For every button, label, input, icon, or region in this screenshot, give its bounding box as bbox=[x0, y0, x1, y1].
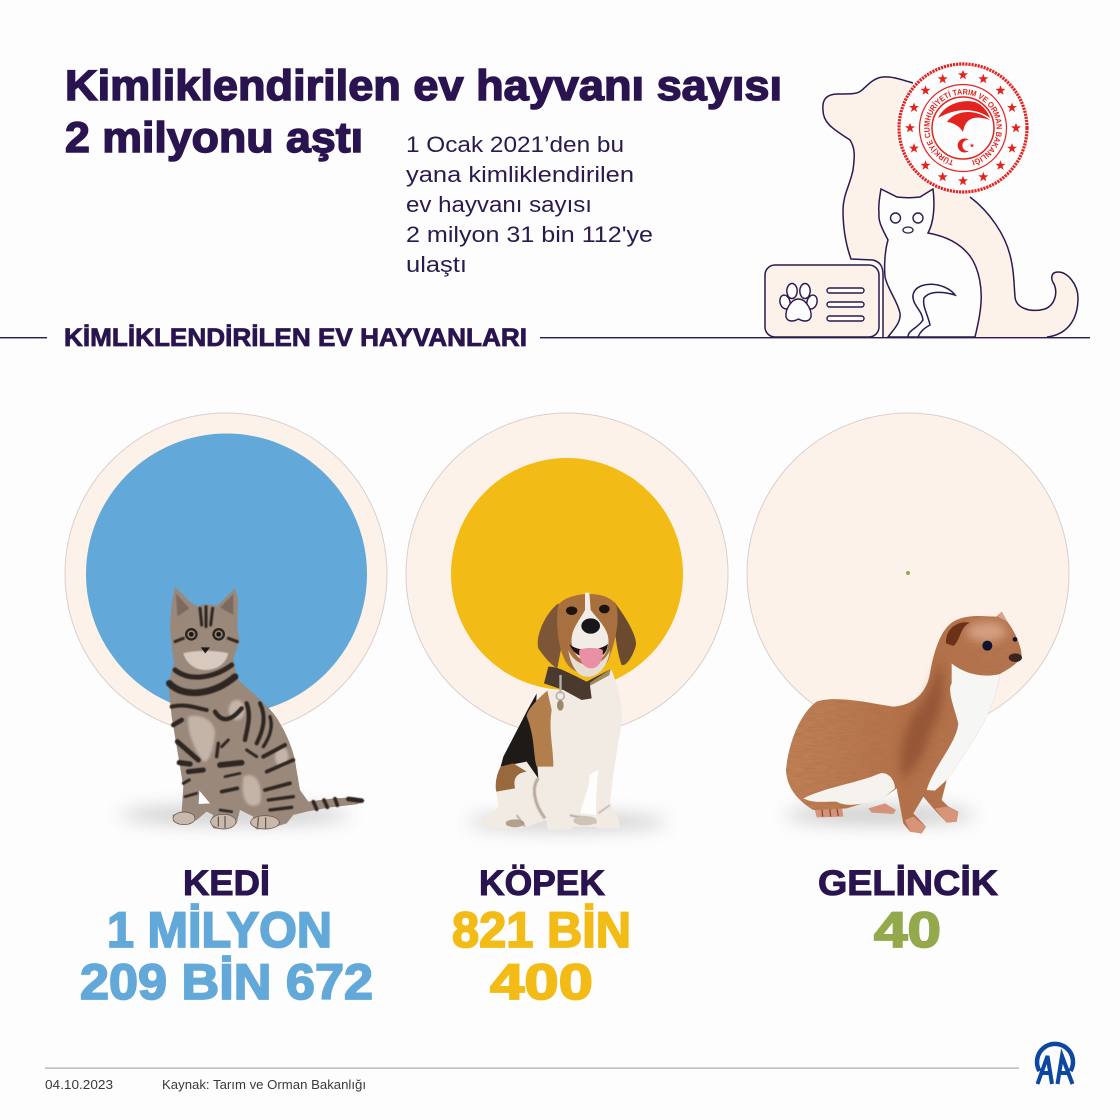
ID card bbox=[765, 265, 879, 337]
beagle left ear bbox=[538, 603, 563, 668]
label: ferret count bbox=[818, 864, 998, 958]
photo: ferret bbox=[785, 612, 1022, 833]
icon: AA logo bbox=[1037, 1044, 1073, 1084]
intro text: ulaştı bbox=[406, 252, 467, 277]
footer: date and source bbox=[45, 1068, 1019, 1092]
seal: ministry of agriculture and forestry bbox=[896, 62, 1029, 195]
title bbox=[65, 62, 782, 162]
ferret white belly bbox=[803, 773, 895, 805]
ferret body bbox=[786, 612, 1022, 833]
label: cat count: KEDİ bbox=[183, 864, 270, 903]
intro text: 1 Ocak 2021’den bu bbox=[406, 132, 624, 157]
beagle white blaze and muzzle bbox=[571, 593, 608, 662]
beagle brown shoulder bbox=[527, 691, 553, 767]
cat lighter patches bbox=[188, 700, 288, 806]
dog silhouette bbox=[823, 77, 1078, 337]
title: Kimliklendirilen ev hayvanı sayısı bbox=[65, 62, 782, 110]
beagle nose bbox=[581, 618, 600, 634]
beagle right ear bbox=[614, 602, 636, 665]
beagle mouth bbox=[569, 644, 608, 658]
ferret nose bbox=[1009, 653, 1022, 662]
cat light chin and muzzle bbox=[183, 651, 228, 670]
label: dog count bbox=[452, 864, 631, 1010]
card text lines bbox=[827, 288, 864, 321]
cat ears inner bbox=[176, 593, 233, 617]
cat markings bbox=[169, 607, 362, 812]
ferret dark neck and shoulder bbox=[901, 660, 943, 780]
beagle black saddle bbox=[501, 693, 538, 778]
beagle head bbox=[557, 594, 618, 674]
cat eyes bbox=[185, 628, 225, 641]
ferret near feet bbox=[905, 807, 958, 833]
ferret white chest bbox=[927, 663, 1000, 791]
photo: beagle bbox=[467, 593, 667, 830]
seal crescent and star bbox=[958, 138, 969, 153]
beagle paw smudges bbox=[506, 819, 524, 827]
beagle body bbox=[485, 670, 622, 830]
title: 2 milyonu aştı bbox=[65, 114, 363, 162]
section heading with rule: KİMLİKLENDİRİLEN EV HAYVANLARI bbox=[64, 324, 527, 352]
panel: cat circle bbox=[65, 413, 387, 735]
cat tail bbox=[908, 284, 955, 337]
intro text: ev hayvanı sayısı bbox=[406, 192, 592, 217]
photo: cat bbox=[120, 587, 365, 829]
label: cat count: 209 BİN 672 bbox=[80, 954, 373, 1010]
seal circular text: TÜRKİYE CUMHURİYETİ TARIM VE ORMAN BAKANLIĞI bbox=[924, 88, 1002, 166]
beagle collar bbox=[544, 667, 610, 700]
label: dog count: KÖPEK bbox=[479, 864, 605, 903]
label: cat count: 1 MİLYON bbox=[107, 902, 332, 958]
intro text: yana kimliklendirilen bbox=[406, 162, 634, 187]
intro text: 2 milyon 31 bin 112'ye bbox=[406, 222, 653, 247]
label: dog count: 400 bbox=[490, 954, 593, 1010]
dog outline bbox=[823, 77, 1078, 337]
paw print bbox=[778, 284, 819, 321]
label: ferret count: 40 bbox=[874, 902, 941, 958]
label: ferret count: GELİNCİK bbox=[818, 864, 998, 903]
beagle eyes bbox=[566, 605, 610, 615]
panel: ferret circle bbox=[747, 413, 1069, 735]
intro text bbox=[406, 132, 653, 277]
label: dog count: 821 BİN bbox=[452, 902, 631, 958]
ferret eyes bbox=[982, 641, 992, 651]
footer: date and source: Kaynak: Tarım ve Orman Bakanlığı bbox=[162, 1078, 366, 1092]
cat eyes and nose bbox=[890, 213, 900, 223]
seal wing emblem bbox=[938, 101, 990, 132]
illustration: dog, cat and ID card bbox=[765, 77, 1078, 337]
ferret head highlight bbox=[967, 622, 1007, 642]
panel: dog circle bbox=[406, 413, 728, 735]
label: cat count bbox=[80, 864, 373, 1010]
beagle tag bbox=[556, 675, 564, 711]
beagle leg shading bbox=[517, 778, 610, 827]
beagle tongue bbox=[579, 648, 603, 668]
ferret far feet bbox=[813, 803, 896, 817]
cat nose bbox=[201, 647, 210, 653]
footer: date and source: 04.10.2023 bbox=[45, 1078, 113, 1092]
gap between cat legs bbox=[199, 791, 210, 804]
gap between beagle legs bbox=[580, 770, 598, 815]
beagle rear patch bbox=[496, 763, 527, 792]
ferret ear bbox=[946, 622, 970, 646]
cat paws bbox=[173, 812, 279, 829]
cat bbox=[879, 189, 981, 337]
